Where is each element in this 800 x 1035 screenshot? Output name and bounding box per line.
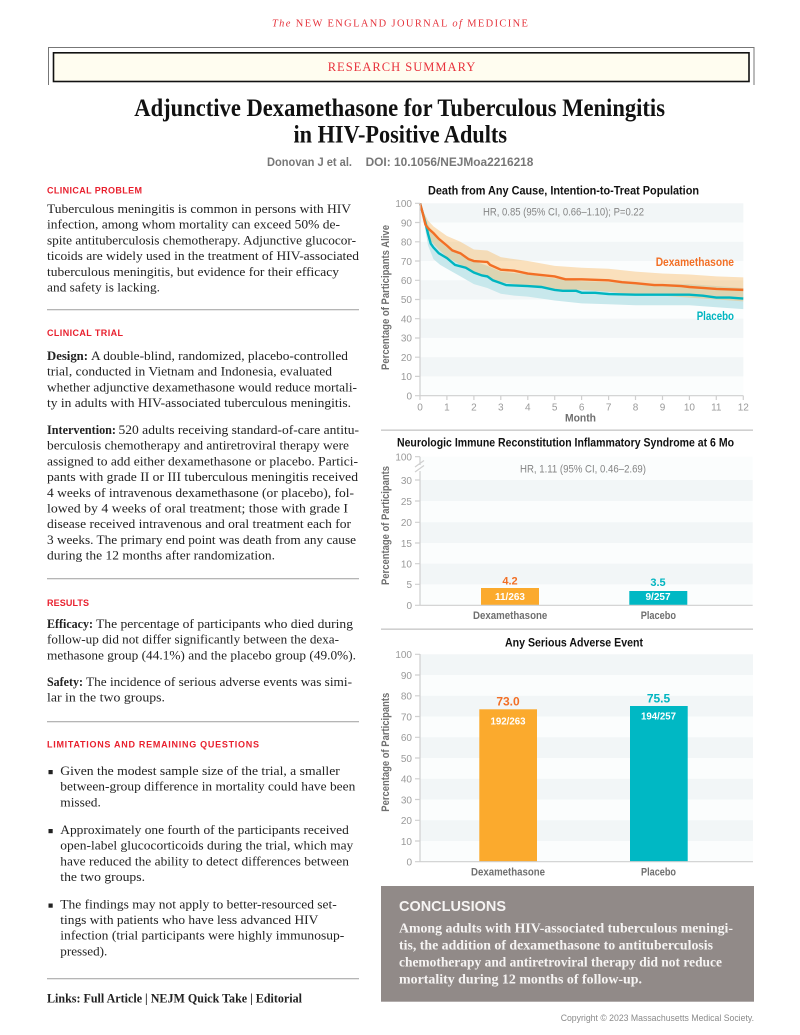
panel: results xyxy=(47,598,356,705)
heading: serious adverse event: Any Serious Adverse Event xyxy=(505,636,643,650)
axes: 80 xyxy=(401,692,412,703)
text: efficacy: follow-up did not differ significantly between the dexa- xyxy=(47,632,339,647)
axes with axis break: 100 xyxy=(395,452,412,464)
label: placebo: Placebo xyxy=(697,309,734,323)
panel: survival chart xyxy=(380,184,749,425)
bar: dexamethasone: 11/263 xyxy=(495,592,525,603)
byline: Donovan J et al. xyxy=(267,155,352,169)
axes: 70 xyxy=(401,257,412,268)
placebo curve xyxy=(420,203,743,299)
text: conclusions: chemotherapy and antiretroviral therapy did not reduce xyxy=(399,954,722,969)
plot background xyxy=(420,457,753,605)
bar: placebo xyxy=(630,692,688,862)
axes with axis break: 5 xyxy=(406,580,412,591)
bar: dexamethasone: 192/263 xyxy=(490,717,526,728)
panel: clinical trial xyxy=(47,328,359,563)
bar: dexamethasone xyxy=(479,694,537,862)
bullet: generalizability: pressed). xyxy=(60,943,107,958)
dexamethasone curve xyxy=(420,203,743,290)
text: intervention: assigned to add either dexamethasone or placebo. Partici- xyxy=(47,453,358,468)
text: conclusions: Among adults with HIV-associated tuberculous meningi- xyxy=(399,920,733,935)
axes: 90 xyxy=(401,218,412,229)
text: conclusions: tis, the addition of dexamethasone to antituberculosis xyxy=(399,937,713,952)
text: clinical problem: Tuberculous meningitis is common in persons with HIV xyxy=(47,201,352,216)
copyright: Copyright © 2023 Massachusetts Medical Society. xyxy=(561,1013,754,1024)
bullet: open-label glucocorticoids: open-label glucocorticoids during the trial, which may xyxy=(60,838,354,853)
heading: clinical trial: CLINICAL TRIAL xyxy=(47,328,124,338)
axes with axis break: 20 xyxy=(401,518,412,529)
axes: 50 xyxy=(401,295,412,306)
axes: 100 xyxy=(395,650,412,661)
text: efficacy xyxy=(47,616,356,662)
text: conclusions xyxy=(399,920,733,986)
axes: 10 xyxy=(401,372,412,383)
survival curves with confidence bands xyxy=(420,203,743,309)
text: intervention: lowed by 4 weeks of oral treatment; those with grade I xyxy=(47,500,348,516)
axes: 1 xyxy=(444,403,450,414)
label: dexamethasone: Dexamethasone xyxy=(656,255,734,269)
bullet: sample size xyxy=(48,763,356,809)
annotation: hazard ratio: HR, 1.11 (95% CI, 0.46–2.69) xyxy=(520,464,646,476)
axes: 90 xyxy=(401,671,412,682)
text: design xyxy=(47,348,357,410)
text: intervention xyxy=(47,422,359,563)
plot background xyxy=(420,654,753,862)
title: in HIV-Positive Adults xyxy=(294,121,507,148)
bullet: sample size: Given the modest sample size of the trial, a smaller xyxy=(60,763,340,778)
heading: survival chart: Death from Any Cause, Intention-to-Treat Population xyxy=(428,184,699,198)
axes: 11 xyxy=(711,403,722,414)
axes with axis break: 25 xyxy=(401,497,412,508)
category labels: Placebo xyxy=(641,867,676,879)
text: safety: The incidence of serious adverse events was simi- xyxy=(86,674,352,689)
bullet: generalizability: infection (trial participants were highly immunosup- xyxy=(60,928,344,943)
panel: limitations and remaining questions xyxy=(47,740,356,958)
text: clinical problem: ticoids are widely used in the treatment of HIV-associated xyxy=(47,248,360,263)
dexamethasone confidence band xyxy=(420,203,743,301)
category labels xyxy=(471,867,676,879)
text: intervention: during the 12 months after randomization. xyxy=(47,548,275,563)
axes: 80 xyxy=(401,238,412,248)
text: intervention: berculosis chemotherapy and antiretroviral therapy were xyxy=(47,438,349,453)
text: safety: Safety: xyxy=(47,674,83,689)
axes: 0 xyxy=(406,858,412,868)
axes: 30 xyxy=(401,334,412,345)
axes: 0 xyxy=(417,403,423,414)
research summary banner xyxy=(48,48,754,85)
bar: placebo: 75.5 xyxy=(647,692,671,706)
axes: 5 xyxy=(552,403,558,414)
text: clinical problem xyxy=(47,201,360,294)
bar: dexamethasone: 4.2 xyxy=(502,576,518,588)
axes: 0 xyxy=(406,392,412,402)
category labels xyxy=(473,610,676,622)
heading: neurologic IRIS: Neurologic Immune Reconstitution Inflammatory Syndrome at 6 Mo xyxy=(397,436,734,450)
text: design: A double-blind, randomized, placebo-controlled xyxy=(91,348,348,363)
axes with axis break: 15 xyxy=(401,539,412,550)
text: safety xyxy=(47,674,352,705)
axes: 70 xyxy=(401,712,412,723)
byline: DOI: 10.1056/NEJMoa2216218 xyxy=(366,155,534,169)
axes: 50 xyxy=(401,754,412,765)
text: efficacy: methasone group (44.1%) and the placebo group (49.0%). xyxy=(47,647,356,662)
heading: clinical problem: CLINICAL PROBLEM xyxy=(47,186,142,196)
axes: 12 xyxy=(738,403,749,414)
text: clinical problem: infection, among whom mortality can exceed 50% de- xyxy=(47,217,340,232)
bar: placebo: 9/257 xyxy=(646,592,671,603)
category labels: Dexamethasone xyxy=(471,867,545,879)
heading: limitations: LIMITATIONS AND REMAINING QUESTIONS xyxy=(47,740,259,750)
text: intervention: 520 adults receiving standard-of-care antitu- xyxy=(118,422,359,437)
axes with axis break: 10 xyxy=(401,560,412,570)
text: intervention: pants with grade II or III tuberculous meningitis received xyxy=(47,469,359,484)
bar: dexamethasone: 73.0 xyxy=(496,694,520,708)
axes: 100 xyxy=(395,199,412,210)
axes: 7 xyxy=(606,403,612,414)
title: Adjunctive Dexamethasone for Tuberculous Meningitis xyxy=(134,95,665,122)
axes: 2 xyxy=(471,403,477,414)
axes with axis break: 0 xyxy=(406,601,412,612)
annotation: hazard ratio: HR, 0.85 (95% CI, 0.66–1.10); P=0.22 xyxy=(483,207,644,219)
category labels: Placebo xyxy=(641,610,676,622)
bullet: generalizability xyxy=(48,896,344,958)
text: efficacy: The percentage of participants who died during xyxy=(96,616,354,631)
bar: dexamethasone xyxy=(481,576,539,605)
text: design: Design: xyxy=(47,348,88,363)
axes: 20 xyxy=(401,816,412,827)
panel: conclusions xyxy=(381,886,754,1002)
bar: placebo: 194/257 xyxy=(641,711,676,722)
heading: results: RESULTS xyxy=(47,598,89,608)
axes: 10 xyxy=(684,403,695,414)
bullet: open-label glucocorticoids: the two groups. xyxy=(60,869,145,884)
y axis title: Percentage of Participants xyxy=(380,693,392,812)
panel: neurologic IRIS chart xyxy=(380,436,753,622)
axes: 40 xyxy=(401,775,412,786)
x axis title: Month xyxy=(565,413,596,425)
text: intervention: 3 weeks. The primary end point was death from any cause xyxy=(47,532,356,547)
axes: 20 xyxy=(401,353,412,364)
axes: 3 xyxy=(498,403,504,414)
axes: 60 xyxy=(401,276,412,287)
axes xyxy=(395,199,749,414)
byline xyxy=(267,155,534,169)
axes: 30 xyxy=(401,795,412,806)
text: intervention: disease received intravenous and oral treatment each for xyxy=(47,516,352,531)
research summary banner: RESEARCH SUMMARY xyxy=(328,60,475,74)
links: Links: Full Article | NEJM Quick Take | Editorial xyxy=(47,991,302,1006)
text: efficacy: Efficacy: xyxy=(47,616,93,631)
placebo confidence band xyxy=(420,203,743,309)
bar: placebo xyxy=(629,577,687,605)
bullet: open-label glucocorticoids xyxy=(48,822,354,884)
text: clinical problem: spite antituberculosis chemotherapy. Adjunctive glucocor- xyxy=(47,232,356,247)
text: conclusions: mortality during 12 months of follow-up. xyxy=(399,971,642,986)
journal masthead: The NEW ENGLAND JOURNAL of MEDICINE xyxy=(272,18,529,30)
axes: 40 xyxy=(401,314,412,326)
text: safety: lar in the two groups. xyxy=(47,690,165,705)
text: design: whether adjunctive dexamethasone would reduce mortali- xyxy=(47,379,357,394)
bullet: open-label glucocorticoids: Approximately one fourth of the participants received xyxy=(60,822,349,837)
panel: clinical problem xyxy=(47,186,360,294)
panel: serious adverse event chart xyxy=(380,636,753,879)
axes with axis break: 30 xyxy=(401,476,412,487)
axes: 8 xyxy=(633,403,639,414)
category labels: Dexamethasone xyxy=(473,610,547,622)
y axis title: Percentage of Participants Alive xyxy=(380,225,392,370)
bar: placebo: 3.5 xyxy=(650,577,666,589)
bullet: generalizability: The findings may not apply to better-resourced set- xyxy=(60,896,337,911)
axes: 4 xyxy=(525,403,531,414)
text: design: ty in adults with HIV-associated tuberculous meningitis. xyxy=(47,395,351,410)
bullet: sample size: missed. xyxy=(60,794,101,809)
y axis title: Percentage of Participants xyxy=(380,466,392,585)
title xyxy=(134,95,665,148)
axes: 60 xyxy=(401,733,412,744)
text: clinical problem: and safety is lacking. xyxy=(47,280,160,294)
axes xyxy=(395,650,753,868)
text: clinical problem: tuberculous meningitis, but evidence for their efficacy xyxy=(47,264,340,279)
text: design: trial, conducted in Vietnam and Indonesia, evaluated xyxy=(47,364,333,379)
axes: 6 xyxy=(579,403,585,414)
bullet: sample size: between-group difference in mortality could have been xyxy=(60,779,356,794)
text: intervention: 4 weeks of intravenous dexamethasone (or placebo), fol- xyxy=(47,485,354,500)
text: intervention: Intervention: xyxy=(47,422,116,437)
axes: 10 xyxy=(401,837,412,848)
plot background xyxy=(420,203,743,396)
bullet: generalizability: tings with patients who have less advanced HIV xyxy=(60,912,319,927)
bullet: open-label glucocorticoids: have reduced the ability to detect differences between xyxy=(60,853,350,868)
axes with axis break xyxy=(395,452,753,612)
heading: conclusions: CONCLUSIONS xyxy=(399,898,506,915)
axes: 9 xyxy=(660,403,666,414)
